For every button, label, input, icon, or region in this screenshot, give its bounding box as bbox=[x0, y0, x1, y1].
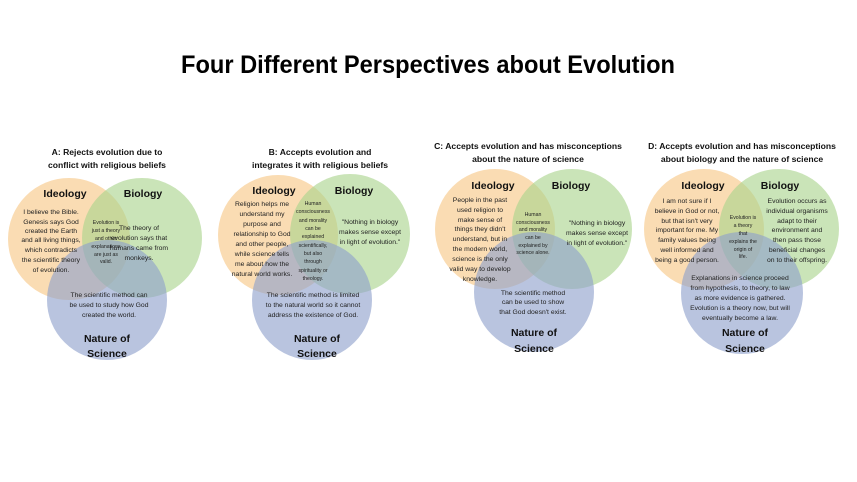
venn circles D bbox=[644, 169, 839, 354]
text: overlap D: that bbox=[739, 231, 748, 237]
label: Ideology D: Ideology bbox=[681, 180, 725, 192]
text: ideology A bbox=[21, 209, 81, 274]
text: biology B bbox=[339, 219, 401, 246]
label: Nature of Science D: Science bbox=[725, 343, 765, 355]
text: ideology C bbox=[449, 197, 511, 283]
text: overlap D: explains the bbox=[729, 239, 757, 245]
label: Nature of Science D bbox=[722, 327, 769, 355]
text: ideology A: and all living things, bbox=[21, 237, 81, 244]
title: Four Different Perspectives about Evolution bbox=[181, 51, 675, 79]
text: biology C bbox=[566, 220, 628, 247]
text: biology B: "Nothing in biology bbox=[342, 219, 399, 226]
venn circles C bbox=[435, 169, 632, 352]
panel: C bbox=[434, 141, 632, 355]
text: ideology B: natural world works. bbox=[232, 271, 292, 278]
text: ideology A: Genesis says God bbox=[23, 219, 79, 226]
heading: B: integrates it with religious beliefs bbox=[252, 160, 388, 170]
text: nature C bbox=[499, 290, 567, 316]
text: ideology A: created the Earth bbox=[25, 228, 77, 235]
label: Nature of Science B bbox=[294, 333, 341, 360]
heading: D: D: Accepts evolution and has misconceptions bbox=[648, 141, 836, 151]
text: biology A: monkeys. bbox=[124, 255, 154, 262]
text: overlap A: explanations bbox=[91, 244, 121, 250]
text: biology C: "Nothing in biology bbox=[569, 220, 626, 227]
text: ideology A: I believe the Bible. bbox=[23, 209, 79, 216]
label: Nature of Science C: Nature of bbox=[511, 327, 558, 339]
text: overlap C: science alone. bbox=[516, 250, 550, 256]
text: ideology A: which contradicts bbox=[24, 247, 78, 254]
text: nature A: created the world. bbox=[82, 312, 136, 319]
text: overlap D: origin of bbox=[734, 247, 753, 253]
text: nature D: Evolution is a theory now, but will bbox=[690, 305, 790, 312]
heading: C: about the nature of science bbox=[472, 154, 584, 164]
text: biology A bbox=[110, 225, 168, 262]
text: nature D: from hypothesis, to theory, to law bbox=[690, 285, 790, 292]
label: Nature of Science C: Science bbox=[514, 343, 554, 355]
text: biology D: beneficial changes bbox=[769, 247, 826, 254]
text: ideology B: and other people, bbox=[236, 241, 289, 248]
text: ideology D: being a good person. bbox=[655, 257, 719, 264]
text: ideology C: things they didn't bbox=[455, 226, 506, 233]
text: biology C: in light of evolution." bbox=[567, 240, 628, 247]
label: Ideology B: Ideology bbox=[252, 185, 296, 197]
text: nature A: The scientific method can bbox=[70, 292, 148, 299]
text: biology D: adapt to their bbox=[777, 218, 818, 225]
text: overlap B: consciousness bbox=[296, 209, 330, 215]
text: ideology D: well informed and bbox=[659, 247, 714, 254]
text: overlap C: consciousness bbox=[516, 220, 550, 226]
text: ideology D: I am not sure if I bbox=[663, 198, 711, 205]
heading: C: C: Accepts evolution and has misconceptions bbox=[434, 141, 622, 151]
text: ideology C: the modern world, bbox=[453, 246, 507, 253]
label: Biology A: Biology bbox=[124, 188, 162, 200]
text: biology D: individual organisms bbox=[766, 208, 828, 215]
text: nature D: as more evidence is gathered. bbox=[694, 295, 786, 302]
label: Nature of Science B: Science bbox=[297, 348, 337, 360]
text: overlap A: are just as bbox=[94, 252, 118, 258]
label: Biology D: Biology bbox=[761, 180, 799, 192]
label: Nature of Science A: Nature of bbox=[84, 333, 131, 345]
text: overlap C: Human bbox=[525, 212, 541, 218]
text: overlap A: Evolution is bbox=[93, 220, 120, 226]
label: Nature of Science C bbox=[511, 327, 558, 355]
text: ideology D: but that isn't very bbox=[661, 218, 713, 225]
text: overlap D: a theory bbox=[734, 223, 753, 229]
text: ideology B: me about how the bbox=[235, 261, 289, 268]
text: nature B: address the existence of God. bbox=[268, 312, 358, 319]
text: nature D bbox=[690, 275, 790, 322]
text: ideology D: family values being bbox=[658, 237, 716, 244]
venn circles B bbox=[218, 174, 410, 360]
venn circles A bbox=[8, 178, 202, 360]
text: ideology C: science is the only bbox=[452, 256, 508, 263]
heading: A: conflict with religious beliefs bbox=[48, 160, 166, 170]
text: overlap B: theology. bbox=[303, 276, 323, 282]
text: biology D bbox=[766, 198, 828, 264]
heading: B bbox=[252, 147, 388, 170]
text: ideology B: while science tells bbox=[234, 251, 290, 258]
panel: A bbox=[8, 147, 202, 360]
text: ideology D: important for me. My bbox=[656, 227, 719, 234]
text: nature B: The scientific method is limited bbox=[267, 292, 359, 299]
text: overlap B: scientifically, bbox=[299, 243, 327, 249]
label: Nature of Science B: Nature of bbox=[294, 333, 341, 345]
label: Nature of Science D: Nature of bbox=[722, 327, 769, 339]
text: overlap A: just a theory bbox=[91, 228, 121, 234]
text: overlap B: through bbox=[304, 259, 322, 265]
text: nature C: that God doesn't exist. bbox=[499, 309, 567, 316]
panel: D bbox=[644, 141, 839, 355]
label: Nature of Science A: Science bbox=[87, 348, 127, 360]
text: overlap B: but also bbox=[304, 251, 322, 257]
heading: B: B: Accepts evolution and bbox=[269, 147, 371, 157]
text: ideology B: understand my bbox=[240, 211, 285, 218]
text: biology A: The theory of bbox=[119, 225, 159, 232]
text: nature C: The scientific method bbox=[501, 290, 565, 297]
text: biology D: on to their offspring. bbox=[767, 257, 827, 264]
text: ideology C: knowledge. bbox=[463, 276, 497, 283]
text: nature B bbox=[266, 292, 360, 319]
text: ideology C: valid way to develop bbox=[449, 266, 511, 273]
text: overlap B: and morality bbox=[299, 218, 328, 224]
text: overlap A: valid. bbox=[100, 259, 112, 265]
label: Nature of Science A bbox=[84, 333, 131, 360]
label: Biology B: Biology bbox=[335, 185, 373, 197]
text: biology C: makes sense except bbox=[566, 230, 628, 237]
text: biology D: then pass those bbox=[773, 237, 821, 244]
text: overlap C: and morality bbox=[519, 227, 548, 233]
text: nature B: to the natural world so it cannot bbox=[266, 302, 360, 309]
label: Ideology C: Ideology bbox=[471, 180, 515, 192]
text: nature D: eventually become a law. bbox=[702, 315, 778, 322]
text: biology D: Evolution occurs as bbox=[768, 198, 827, 205]
heading: C bbox=[434, 141, 622, 164]
heading: D bbox=[648, 141, 836, 164]
text: biology A: humans came from bbox=[110, 245, 168, 252]
text: nature D: Explanations in science proceed bbox=[691, 275, 789, 282]
text: overlap D: Evolution is bbox=[730, 215, 757, 221]
text: ideology B bbox=[232, 201, 292, 278]
text: overlap C: explained by bbox=[518, 243, 548, 249]
text: biology A: evolution says that bbox=[111, 235, 167, 242]
text: overlap B: can be bbox=[305, 226, 321, 232]
heading: D: about biology and the nature of science bbox=[661, 154, 823, 164]
text: overlap D bbox=[729, 215, 757, 260]
label: Ideology A: Ideology bbox=[43, 188, 87, 200]
text: ideology C: used religion to bbox=[457, 207, 503, 214]
text: nature A bbox=[70, 292, 149, 319]
text: ideology C: People in the past bbox=[453, 197, 507, 204]
text: overlap B: explained bbox=[302, 234, 324, 240]
text: nature A: be used to study how God bbox=[70, 302, 149, 309]
panel: B bbox=[218, 147, 410, 360]
text: ideology B: purpose and bbox=[243, 221, 281, 228]
text: ideology D: believe in God or not, bbox=[655, 208, 719, 215]
heading: A: A: Rejects evolution due to bbox=[52, 147, 162, 157]
text: ideology B: Religion helps me bbox=[235, 201, 289, 208]
text: overlap C bbox=[516, 212, 550, 256]
text: biology B: makes sense except bbox=[339, 229, 401, 236]
text: nature C: can be used to show bbox=[502, 299, 564, 306]
text: overlap B: spirituality or bbox=[298, 268, 328, 274]
text: ideology C: make sense of bbox=[458, 217, 502, 224]
text: overlap A: and other bbox=[95, 236, 117, 242]
text: ideology C: understand, but in bbox=[453, 236, 507, 243]
text: overlap C: can be bbox=[525, 235, 541, 241]
text: biology B: in light of evolution." bbox=[340, 239, 401, 246]
text: overlap D: life. bbox=[739, 254, 747, 260]
text: ideology A: of evolution. bbox=[33, 267, 69, 274]
text: ideology B: relationship to God bbox=[233, 231, 291, 238]
heading: A bbox=[48, 147, 166, 170]
text: overlap B: Human bbox=[305, 201, 321, 207]
text: ideology D bbox=[655, 198, 719, 264]
text: overlap A bbox=[91, 220, 121, 265]
text: ideology A: the scientific theory bbox=[22, 257, 81, 264]
text: biology D: environment and bbox=[772, 227, 823, 234]
label: Biology C: Biology bbox=[552, 180, 590, 192]
text: overlap B bbox=[296, 201, 330, 282]
